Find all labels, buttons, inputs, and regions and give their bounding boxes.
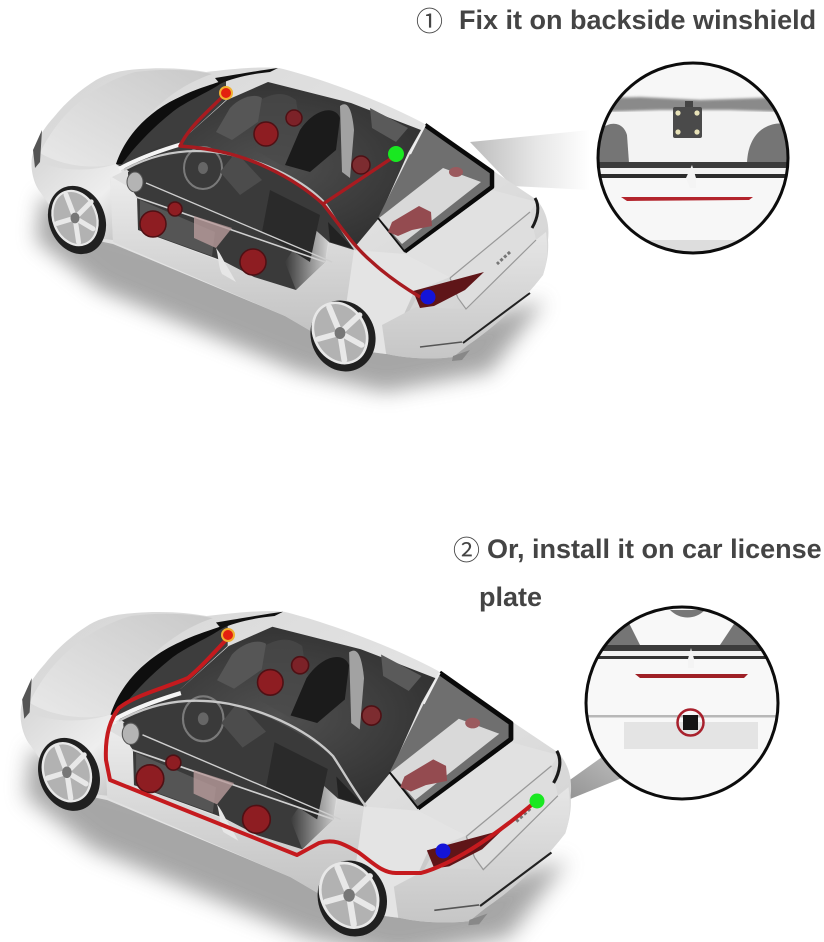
magnifier: camera on backside windshield: [597, 62, 789, 254]
marker: green dot: [530, 794, 544, 808]
car illustration: license plate install: [21, 611, 571, 942]
heading: step 1 fix on backside windshield: Fix it on backside winshield: [459, 5, 816, 35]
heading: step 2 install on license plate: ②: [453, 529, 480, 568]
marker: green dot: [388, 146, 404, 162]
marker: blue dot: [436, 844, 450, 858]
heading: step 1 fix on backside windshield: ①: [416, 0, 443, 39]
heading: step 2 install on license plate: plate: [479, 582, 542, 612]
callout beam: windshield position: [470, 130, 590, 190]
heading: step 2 install on license plate: [453, 529, 822, 612]
camera on windshield: [673, 101, 702, 138]
camera with red highlight ring: [678, 710, 704, 736]
car illustration: windshield install: [31, 67, 548, 392]
magnifier: camera on license plate: [585, 606, 779, 800]
red cable route: windshield install: [180, 93, 420, 297]
marker: blue dot: [420, 290, 436, 304]
red cable route: license plate install: [106, 640, 535, 873]
heading: step 1 fix on backside windshield: [416, 0, 816, 39]
marker: red dot: [220, 87, 232, 99]
marker: red dot: [222, 629, 234, 641]
heading: step 2 install on license plate: Or, install it on car license: [487, 534, 822, 564]
callout beam: license plate position: [546, 757, 622, 808]
